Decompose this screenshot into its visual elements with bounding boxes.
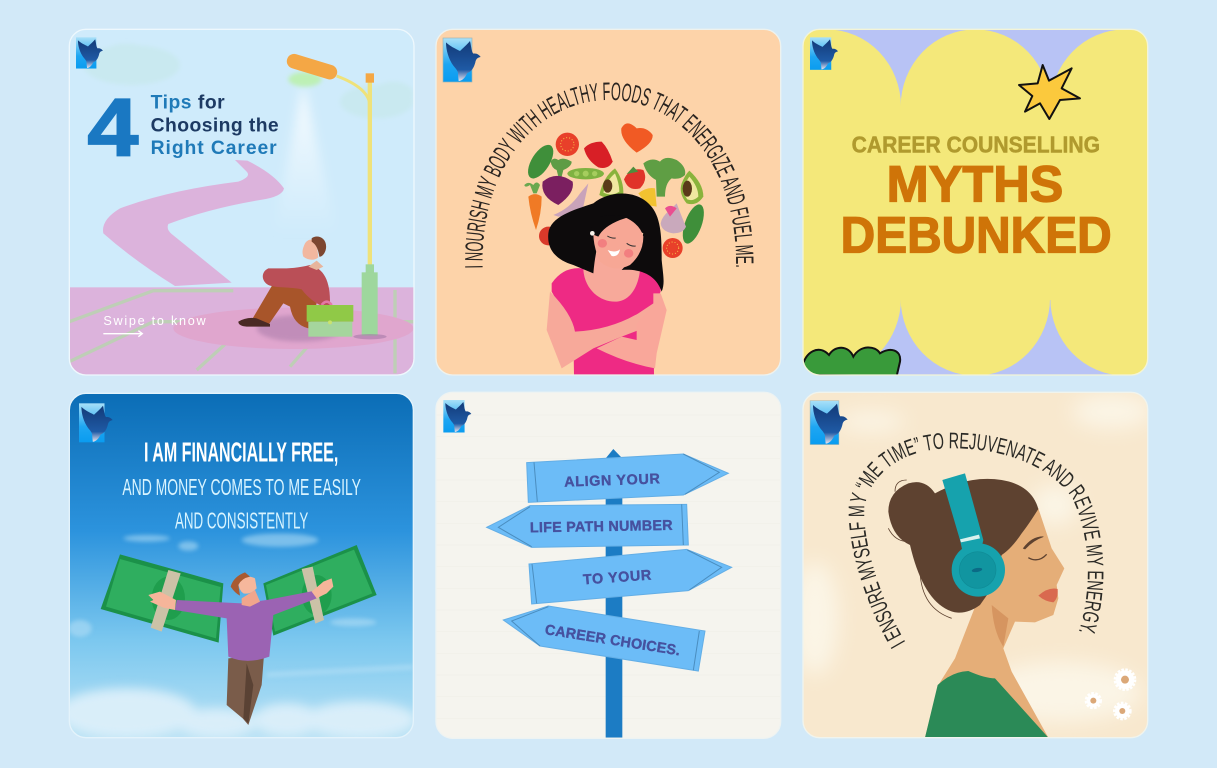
panel: healthy foods affirmation [435,28,782,376]
sign: align your: ALIGN YOUR [564,471,661,491]
heading number 4: 4 [87,83,139,174]
street lamp [285,52,387,339]
ground [69,287,414,375]
ground lines [69,290,414,373]
left banknote wing [101,554,223,643]
panel: financially free affirmation [57,393,417,738]
heading text: Tips for [151,93,225,114]
right banknote wing [263,545,377,636]
cloud left [86,45,178,84]
sign: to your [529,549,732,604]
panel: 4 tips for choosing the right career [69,29,414,375]
panel: me time affirmation [802,392,1148,738]
wispy clouds [68,533,413,677]
soft background blobs [792,395,1152,722]
panel: signpost life path number [436,392,781,738]
panel: career counselling myths debunked [802,28,1148,376]
logo [810,37,838,70]
cloud bank [57,688,417,738]
yellow scallop shape [804,30,1147,374]
ground spot [173,308,413,349]
light beam [286,90,323,200]
sign: to your: TO YOUR [582,568,652,588]
arrow [103,331,142,337]
line three: AND CONSISTENTLY [175,507,309,533]
curved text: I ENSURE MYSELF MY “ME TIME” TO REJUVENATE AND REVIVE MY ENERGY. [848,432,1104,649]
cloud right [342,84,412,117]
shadow [257,315,343,342]
heading text: Choosing the [151,115,279,136]
woman hugging herself [547,194,667,375]
sign: life path number [487,504,688,547]
curved text: I NOURISH MY BODY WITH HEALTHY FOODS THAT ENERGIZE AND FUEL ME. [465,82,754,268]
sign: career choices: CAREER CHOICES. [544,622,681,659]
logo [79,403,113,442]
man flying [148,572,333,725]
briefcase [307,302,353,337]
heading line: I AM FINANCIALLY FREE, [144,437,338,468]
title line 1: MYTHS [887,156,1063,213]
sign: life path number: LIFE PATH NUMBER [530,518,673,536]
sign: career choices [503,606,705,671]
sign: align your [527,454,728,502]
logo [443,38,481,82]
signpost pole [606,449,622,738]
swipe label: Swipe to know [103,314,207,328]
line two: AND MONEY COMES TO ME EASILY [122,474,361,500]
vegetables [523,123,708,258]
road [103,160,284,286]
title line 2: DEBUNKED [841,206,1112,263]
heading text [151,93,279,159]
logo [443,400,471,432]
heading text: Right Career [151,138,277,159]
man sitting [238,236,330,328]
bush [803,347,900,376]
logo [810,401,848,444]
logo [76,37,103,69]
daisies [1087,670,1134,718]
brick texture [436,415,781,718]
subtitle: CAREER COUNSELLING [852,131,1100,157]
woman profile with headphones [888,473,1064,738]
star [1019,65,1080,119]
